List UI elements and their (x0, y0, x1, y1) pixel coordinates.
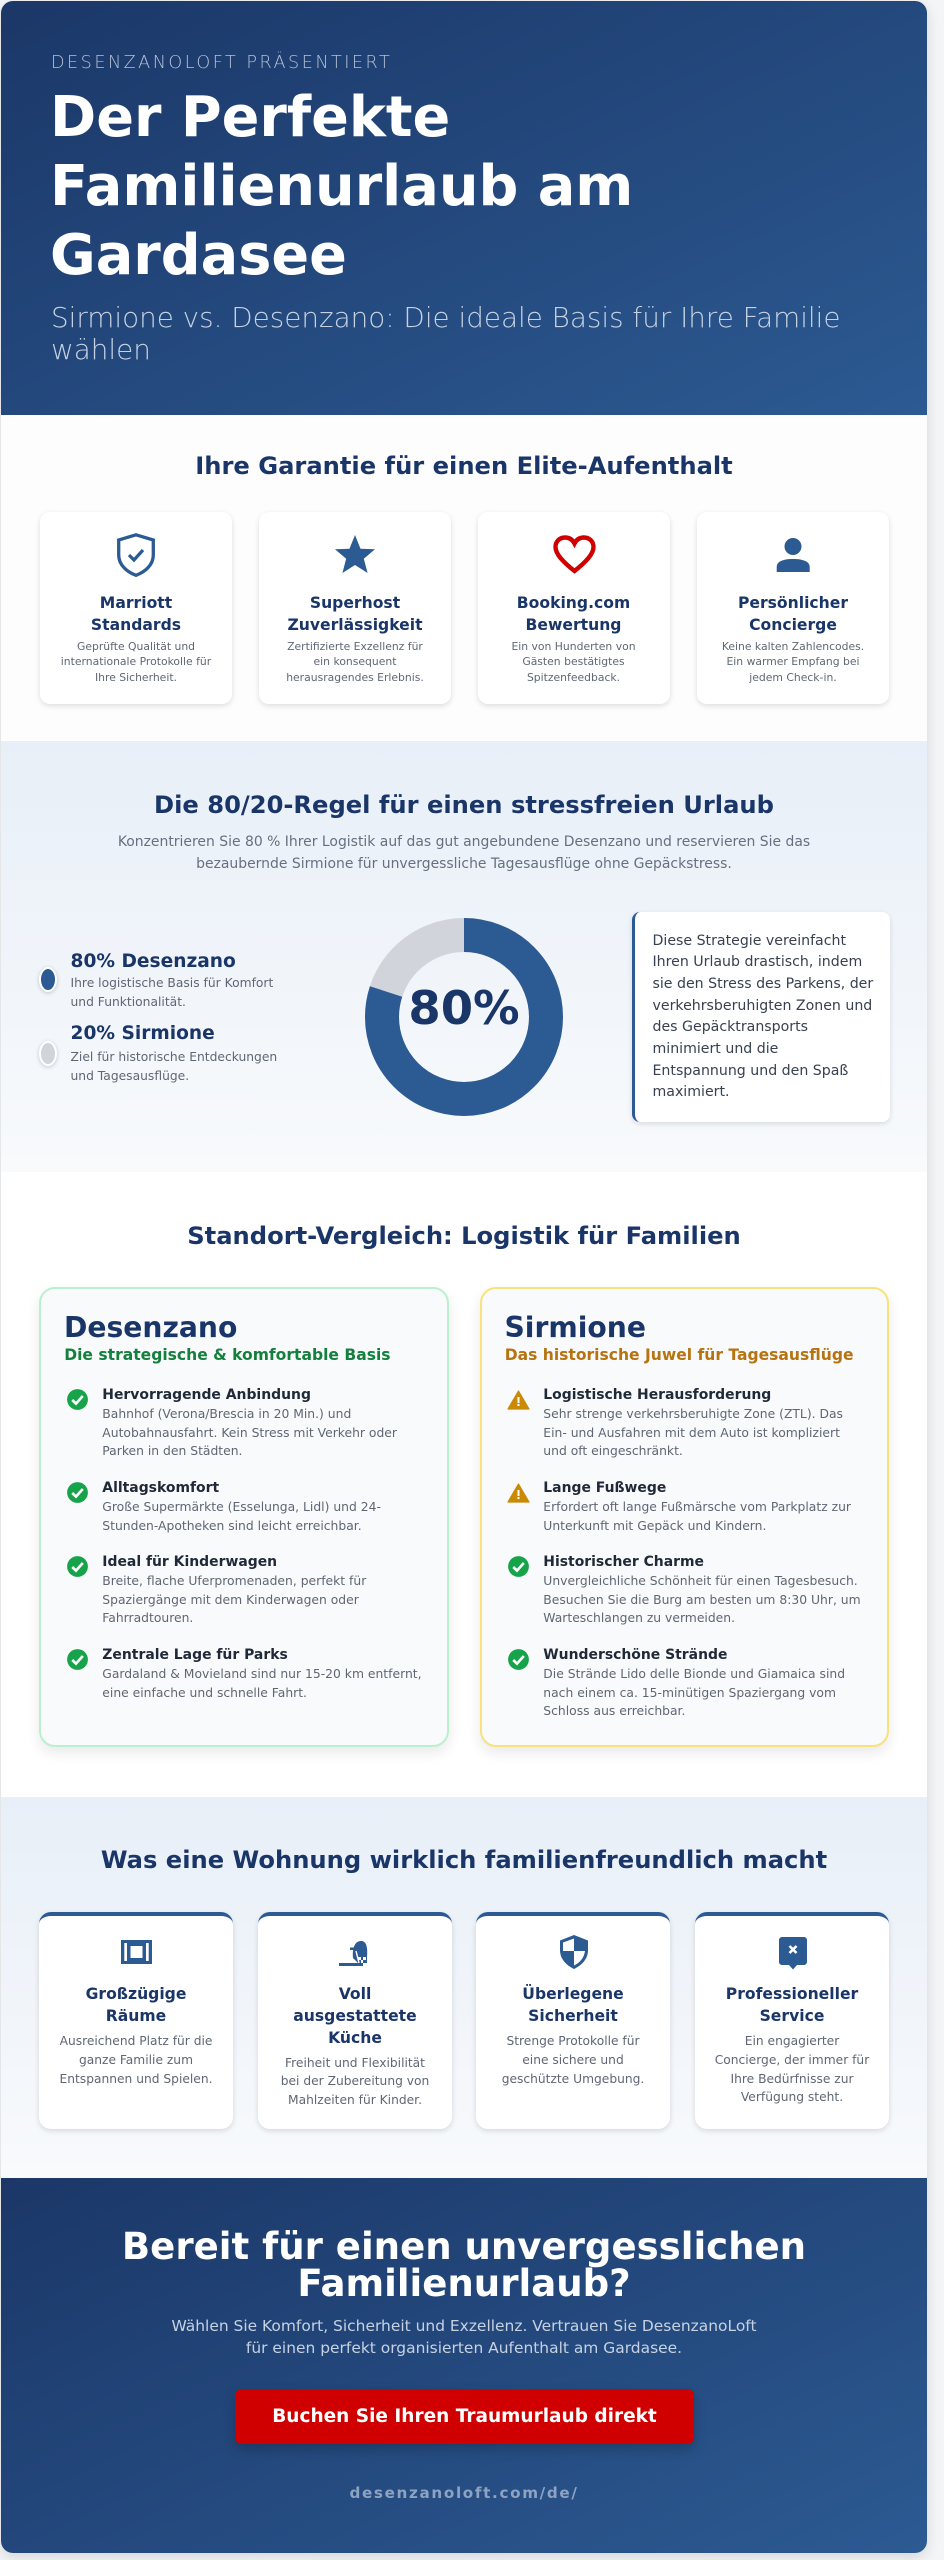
item: walking (507, 1480, 851, 1533)
item text: nach einem ca. 15-minütigen Spaziergang vom (543, 1686, 836, 1700)
item text (543, 1500, 851, 1533)
card text: Spitzenfeedback. (527, 670, 620, 684)
item text: Gardaland & Movieland sind nur 15-20 km entfernt, (102, 1667, 422, 1681)
button (235, 2389, 694, 2444)
legend dot: Sirmione (38, 1041, 57, 1066)
icon: quartered shield (560, 1935, 588, 1969)
card title (91, 594, 181, 634)
item text: Erfordert oft lange Fußmärsche vom Parkplatz zur (543, 1500, 851, 1514)
item text: und oft eingeschränkt. (543, 1444, 683, 1458)
card text: internationale Protokolle für (61, 655, 211, 668)
item text (543, 1407, 843, 1458)
heading: Was eine Wohnung wirklich familienfreundlich macht (101, 1846, 827, 1874)
donut value: 80% (408, 981, 520, 1035)
icon: spacious rooms (121, 1940, 152, 1964)
item title: Alltagskomfort (102, 1480, 219, 1496)
legend text: Sirmione: Ziel für historische Entdeckungen (70, 1050, 277, 1064)
icon: warning (507, 1390, 530, 1410)
callout: Entspannung und den Spaß (652, 1063, 848, 1079)
item title: Hervorragende Anbindung (102, 1387, 311, 1403)
panel: call to action footer (1, 2178, 927, 2553)
icon: check (67, 1649, 88, 1670)
item text: Besuchen Sie die Burg am besten um 8:30 Uhr, um (543, 1593, 861, 1607)
subtitle: wählen (51, 333, 151, 366)
card text: Ein von Hunderten von (511, 640, 636, 652)
callout (632, 912, 890, 1122)
eyebrow: DESENZANOLOFT PRÄSENTIERT (51, 53, 392, 73)
card title: Service (760, 2007, 824, 2025)
panel: 80/20 rule (1, 741, 927, 1172)
donut chart (365, 918, 563, 1116)
title: Der Perfekte (50, 84, 450, 150)
card text: Ihre Bedürfnisse zur (730, 2072, 854, 2086)
card text (286, 640, 424, 684)
item: logistics (507, 1387, 843, 1458)
item text: Autobahnausfahrt. Kein Stress mit Verkehr oder (102, 1426, 397, 1440)
card text: jedem Check-in. (749, 670, 837, 684)
item: everyday comfort (67, 1480, 381, 1533)
item text: Unterkunft mit Gepäck und Kindern. (543, 1519, 766, 1533)
item text: Breite, flache Uferpromenaden, perfekt für (102, 1574, 366, 1588)
card title: Räume (106, 2007, 166, 2025)
item: parks (67, 1647, 422, 1700)
text: Wählen Sie Komfort, Sicherheit und Exzellenz. Vertrauen Sie DesenzanoLoft (171, 2317, 757, 2335)
panel: Sirmione (480, 1287, 889, 1747)
card title: ausgestattete (293, 2007, 417, 2025)
heading: Familienurlaub? (297, 2262, 631, 2305)
legend dot: Desenzano (38, 967, 57, 992)
card text: Ein engagierter (745, 2034, 839, 2048)
item text: Große Supermärkte (Esselunga, Lidl) und 24- (102, 1500, 381, 1514)
card title: Professioneller (726, 1985, 858, 2003)
card title: Zuverlässigkeit (287, 616, 423, 634)
item: beaches (508, 1646, 878, 1716)
icon: heart (553, 535, 596, 574)
card title: Booking.com (517, 594, 630, 612)
heading (1, 2228, 927, 2302)
card title (695, 1983, 889, 2027)
card text: Ausreichend Platz für die (60, 2034, 212, 2048)
card title: Superhost (310, 594, 400, 612)
card text: Entspannen und Spielen. (60, 2072, 212, 2086)
item title: Logistische Herausforderung (543, 1387, 771, 1403)
item text: Spaziergänge mit dem Kinderwagen oder (102, 1593, 359, 1607)
subtitle: Sirmione vs. Desenzano: Die ideale Basis für Ihre Familie (51, 301, 840, 334)
legend text: Desenzano: Ihre logistische Basis für Komfort (70, 976, 273, 990)
title (50, 84, 633, 288)
item: strollers (67, 1554, 366, 1625)
card text: Strenge Protokolle für (506, 2034, 640, 2048)
icon: person (776, 538, 810, 572)
card text: Ein warmer Empfang bei (726, 655, 860, 668)
card text: Ihre Sicherheit. (95, 670, 177, 684)
panel: guarantee (1, 415, 927, 740)
card: safety (476, 1912, 670, 2129)
card text (61, 640, 212, 684)
item text: Ein- und Ausfahren mit dem Auto ist kompliziert (543, 1426, 840, 1440)
card text (695, 2032, 889, 2107)
card title: Sicherheit (528, 2007, 618, 2025)
item: charm (508, 1554, 861, 1625)
icon: check (67, 1556, 88, 1577)
card text: Zertifizierte Exzellenz für (287, 640, 423, 652)
card text: Mahlzeiten für Kinder. (288, 2093, 422, 2107)
card: Concierge (697, 512, 889, 704)
place name: Desenzano (64, 1311, 237, 1344)
card: spaces (39, 1912, 233, 2129)
card text: herausragendes Erlebnis. (286, 670, 424, 684)
card text: Gästen bestätigtes (522, 655, 625, 668)
item text (102, 1500, 381, 1533)
card text (39, 2032, 233, 2088)
item text: Unvergleichliche Schönheit für einen Tagesbesuch. (543, 1574, 858, 1588)
card title: Bewertung (526, 616, 621, 634)
heading: Ihre Garantie für einen Elite-Aufenthalt (195, 452, 733, 480)
card text: geschützte Umgebung. (502, 2072, 644, 2086)
item text (543, 1574, 861, 1625)
intro text: Konzentrieren Sie 80 % Ihrer Logistik auf das gut angebundene Desenzano und reservieren Sie das (118, 834, 810, 850)
card text: Freiheit und Flexibilität (285, 2056, 425, 2070)
card title: Persönlicher (738, 594, 848, 612)
item text: Bahnhof (Verona/Brescia in 20 Min.) und (102, 1407, 351, 1421)
card title: Küche (328, 2029, 382, 2047)
card title: Voll (339, 1985, 371, 2003)
card text: eine sichere und (522, 2053, 624, 2067)
icon: warning (507, 1483, 530, 1503)
card text (511, 640, 636, 684)
legend text: Desenzano (70, 976, 273, 1008)
item title: Zentrale Lage für Parks (102, 1647, 288, 1663)
card text (476, 2032, 670, 2088)
card: Superhost (259, 512, 451, 704)
button: Buchen Sie Ihren Traumurlaub direkt (272, 2406, 657, 2427)
title: Familienurlaub am (50, 154, 633, 218)
item title: Historischer Charme (543, 1554, 704, 1570)
card text: Geprüfte Qualität und (77, 640, 195, 652)
intro text: bezaubernde Sirmione für unvergessliche Tagesausflüge ohne Gepäckstress. (196, 856, 732, 872)
card title: Überlegene (522, 1985, 624, 2003)
title: Gardasee (50, 222, 347, 288)
place tagline: Das historische Juwel für Tagesausflüge (505, 1346, 854, 1364)
item text: Schloss aus erreichbar. (543, 1704, 685, 1718)
card title (517, 594, 630, 634)
icon: kitchen (338, 1940, 368, 1968)
item text: Warteschlangen zu vermeiden. (543, 1611, 735, 1625)
card text (258, 2054, 452, 2109)
card title (476, 1983, 670, 2027)
heading: Die 80/20-Regel für einen stressfreien Urlaub (154, 791, 774, 819)
heading: Standort-Vergleich: Logistik für Familien (187, 1222, 741, 1250)
item text: Parken in den Städten. (102, 1444, 242, 1458)
icon: star (335, 535, 375, 573)
callout: sie den Stress des Parkens, der (652, 976, 873, 992)
item text: eine einfache und schnelle Fahrt. (102, 1686, 307, 1700)
card title: Großzügige (86, 1985, 186, 2003)
card text (722, 640, 864, 684)
callout: Ihren Urlaub drastisch, indem (652, 954, 862, 970)
card title: Marriott (100, 594, 172, 612)
icon: check (67, 1389, 88, 1410)
card title (258, 1983, 452, 2049)
legend text: Desenzano: und Funktionalität. (70, 994, 186, 1008)
icon: check (508, 1649, 529, 1670)
website link: desenzanoloft.com/de/ (349, 2484, 579, 2502)
legend text: Sirmione: und Tagesausflüge. (70, 1069, 189, 1083)
card text: ein konsequent (314, 655, 396, 668)
panel: hero header (1, 1, 927, 415)
callout: Diese Strategie vereinfacht (652, 932, 846, 948)
legend title: Sirmione: 20% Sirmione (70, 1023, 215, 1044)
icon: shield check (117, 533, 155, 577)
card: service (695, 1912, 889, 2129)
intro text (118, 834, 810, 872)
card title: Concierge (749, 616, 837, 634)
panel: family-friendly features (1, 1797, 927, 2178)
icon: concierge bubble (779, 1937, 807, 1970)
card text: bei der Zubereitung von (281, 2074, 429, 2088)
panel: location comparison (1, 1172, 927, 1797)
card text: Concierge, der immer für (715, 2053, 869, 2067)
card text: ganze Familie zum (79, 2053, 193, 2067)
callout: maximiert. (652, 1084, 730, 1100)
card title (738, 594, 848, 634)
subtitle (51, 301, 840, 366)
callout: minimiert und die (652, 1041, 778, 1057)
legend (37, 951, 277, 1083)
item text (102, 1574, 366, 1625)
item text: Fahrradtouren. (102, 1611, 193, 1625)
callout: des Gepäcktransports (652, 1019, 808, 1035)
legend text: Sirmione (70, 1050, 277, 1083)
card: Booking (478, 512, 670, 704)
card title (287, 594, 423, 634)
card text: Keine kalten Zahlencodes. (722, 640, 864, 652)
icon: check (508, 1556, 529, 1577)
heading: Bereit für einen unvergesslichen (122, 2225, 806, 2268)
item text: Sehr strenge verkehrsberuhigte Zone (ZTL). Das (543, 1407, 843, 1421)
item: connection (67, 1387, 397, 1458)
item text (543, 1665, 845, 1721)
icon: check (67, 1482, 88, 1503)
panel: Desenzano (39, 1287, 448, 1747)
item text: Die Strände Lido delle Bionde und Giamaica sind (543, 1667, 845, 1681)
place name: Sirmione (504, 1311, 646, 1344)
item title: Wunderschöne Strände (543, 1647, 727, 1663)
item text: Stunden-Apotheken sind leicht erreichbar. (102, 1519, 362, 1533)
item text (102, 1407, 397, 1458)
item title: Lange Fußwege (543, 1480, 666, 1496)
legend title: Desenzano: 80% Desenzano (70, 951, 236, 972)
text (1, 2315, 927, 2359)
card text: Verfügung steht. (741, 2090, 843, 2104)
place tagline: Die strategische & komfortable Basis (64, 1346, 391, 1364)
card: Marriott (40, 512, 232, 704)
card: kitchen (258, 1912, 452, 2129)
callout: verkehrsberuhigten Zonen und (652, 998, 872, 1014)
item text (102, 1667, 422, 1700)
item title: Ideal für Kinderwagen (102, 1554, 277, 1570)
text: für einen perfekt organisierten Aufenthalt am Gardasee. (246, 2339, 682, 2357)
card title: Standards (91, 616, 181, 634)
card title (39, 1983, 233, 2027)
